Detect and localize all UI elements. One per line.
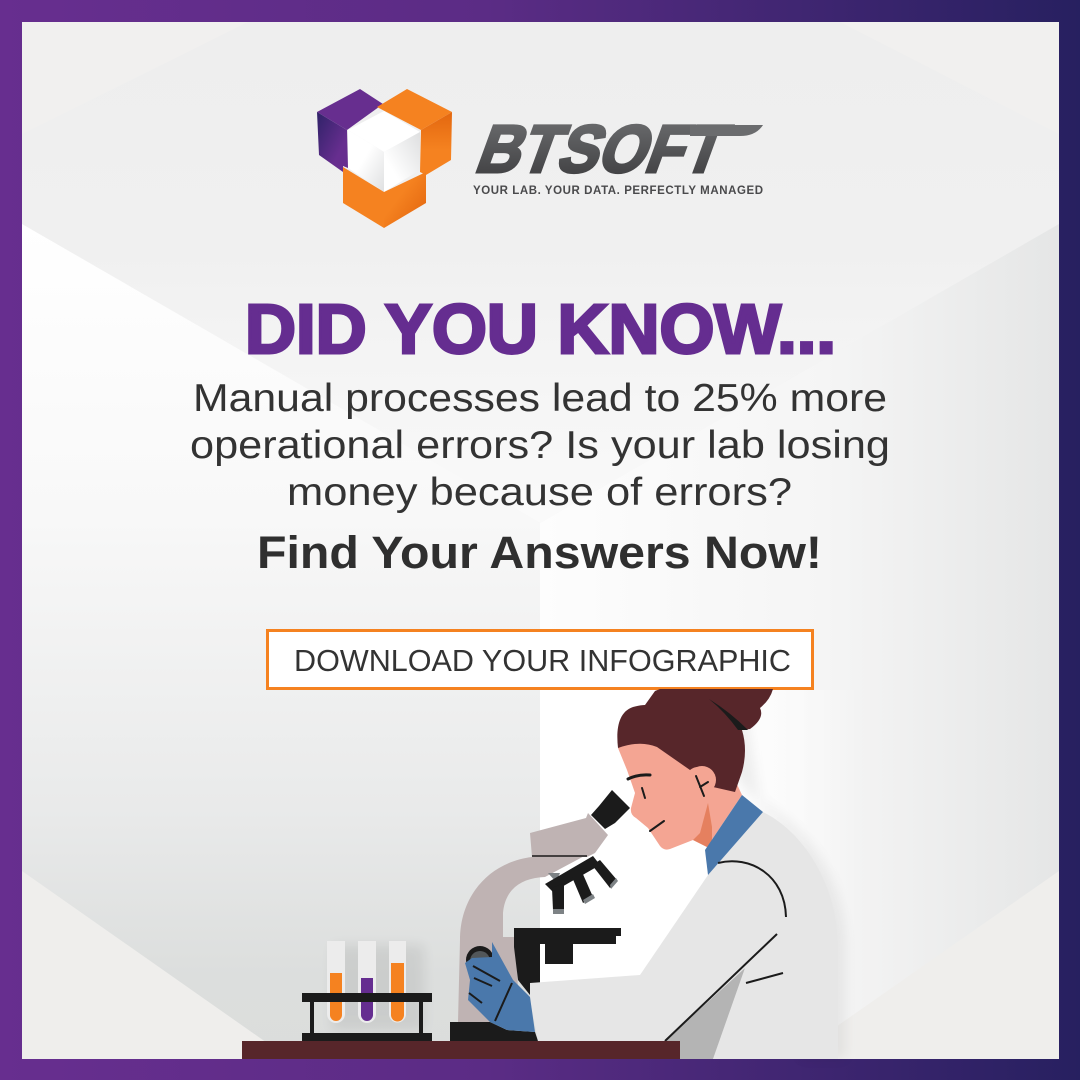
glove bbox=[465, 942, 535, 1032]
base bbox=[450, 1022, 538, 1041]
focus knob bbox=[466, 946, 494, 974]
title: DID YOU KNOW... bbox=[245, 290, 836, 368]
collar bbox=[705, 795, 763, 875]
wordmark: BTSOFT bbox=[468, 111, 739, 187]
ear bbox=[688, 766, 716, 794]
body text bbox=[190, 377, 890, 514]
coat lines bbox=[665, 861, 786, 1041]
button: DOWNLOAD YOUR INFOGRAPHIC bbox=[294, 643, 791, 678]
coat bbox=[530, 812, 838, 1059]
body text: money because of errors? bbox=[287, 471, 792, 514]
icon: logo cubes bbox=[317, 89, 452, 228]
hair bbox=[617, 689, 773, 792]
button bbox=[268, 630, 812, 688]
table bbox=[242, 1041, 680, 1059]
logo: BTSOFT bbox=[317, 89, 763, 228]
objectives bbox=[545, 856, 618, 914]
microscope head bbox=[530, 813, 608, 857]
scientist shadow bbox=[720, 700, 846, 1059]
rack bbox=[302, 993, 432, 1041]
neck and face bbox=[618, 735, 742, 850]
rack and tube shadow bbox=[332, 945, 424, 1030]
tubes bbox=[327, 941, 406, 1023]
face lines bbox=[628, 775, 708, 831]
body text: operational errors? Is your lab losing bbox=[190, 424, 890, 467]
stage bbox=[514, 928, 621, 995]
hair tie bbox=[709, 699, 748, 730]
body text: Manual processes lead to 25% more bbox=[193, 377, 887, 420]
illustration: microscope bbox=[450, 790, 630, 1041]
microscope arm bbox=[458, 853, 590, 1022]
tagline: YOUR LAB. YOUR DATA. PERFECTLY MANAGED bbox=[473, 185, 763, 197]
eyepiece bbox=[591, 790, 630, 829]
illustration: test tube rack bbox=[302, 941, 432, 1041]
neck shadow bbox=[693, 803, 712, 847]
coat inner shadow bbox=[665, 968, 745, 1059]
subheading: Find Your Answers Now! bbox=[257, 527, 822, 578]
illustration: scientist bbox=[465, 689, 838, 1059]
